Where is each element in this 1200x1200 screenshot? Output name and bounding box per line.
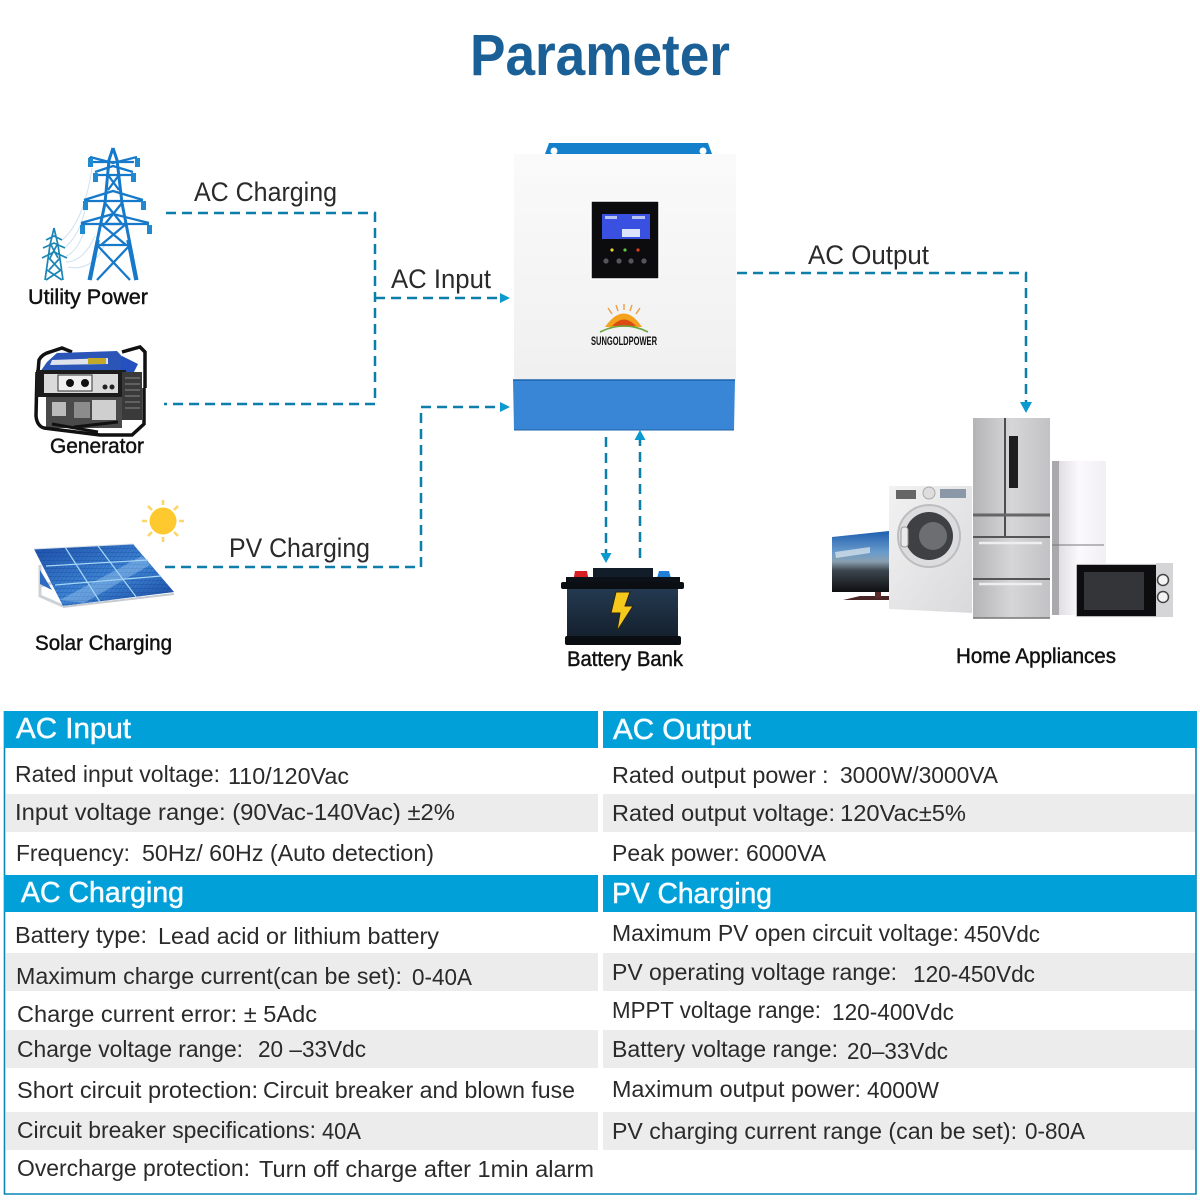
AC Charging rows: Circuit breaker and blown fuse [263, 1077, 575, 1103]
title: Parameter [470, 23, 730, 88]
AC Output rows: 3000W/3000VA [840, 762, 998, 788]
PV Charging rows: Maximum PV open circuit voltage: [612, 920, 959, 946]
spec table [4, 711, 1197, 1194]
AC Input rows: 50Hz/ 60Hz (Auto detection) [142, 840, 434, 866]
icon: solar panel [34, 544, 174, 607]
washing machine [889, 486, 972, 613]
label: home appliances: Home Appliances [956, 644, 1116, 668]
PV Charging rows: 120-400Vdc [832, 999, 954, 1025]
arrow: AC output [737, 273, 1032, 413]
PV Charging rows [612, 920, 1085, 1144]
AC Charging rows: Circuit breaker specifications: [17, 1117, 316, 1143]
arrow: PV charging [165, 402, 510, 567]
label: generator: Generator [50, 434, 144, 458]
label: utility power: Utility Power [28, 285, 148, 309]
PV Charging rows: Maximum output power: [612, 1076, 861, 1102]
table header: AC Charging: AC Charging [21, 877, 184, 909]
arrow: AC charging line from utility and generator [164, 213, 375, 404]
AC Output rows: Rated output power [612, 762, 816, 788]
table header: PV Charging [603, 875, 1196, 912]
icon: generator [36, 347, 145, 435]
logo: sungold power: SUNGOLDPOWER [591, 334, 657, 348]
icon: battery [561, 568, 684, 645]
AC Charging rows: 40A [322, 1118, 361, 1144]
AC Output rows: Rated output voltage: [612, 800, 835, 826]
AC Charging rows: Lead acid or lithium battery [158, 923, 439, 949]
AC Charging rows: Charge current error: ± 5Adc [17, 1001, 317, 1027]
PV Charging rows: 0-80A [1025, 1118, 1085, 1144]
PV Charging rows: MPPT voltage range: [612, 997, 821, 1023]
label: solar charging: Solar Charging [35, 631, 172, 655]
right fridge [1052, 461, 1106, 615]
french door fridge [973, 418, 1050, 618]
table header: AC Output [603, 711, 1197, 748]
AC Output rows [612, 762, 998, 866]
PV Charging rows: PV operating voltage range: [612, 959, 897, 985]
PV Charging rows: 4000W [867, 1077, 940, 1103]
PV Charging rows: 120-450Vdc [913, 961, 1035, 987]
gray row stripes [6, 794, 1195, 1150]
AC Output rows: 120Vac±5% [840, 800, 966, 826]
table header: AC Charging [4, 875, 598, 912]
AC Charging rows: 20 –33Vdc [258, 1036, 366, 1062]
PV Charging rows: PV charging current range (can be set): [612, 1118, 1017, 1144]
AC Charging rows [15, 922, 594, 1182]
label: PV charging: PV Charging [229, 533, 370, 563]
icon: inverter [513, 143, 736, 430]
AC Input rows: Rated input voltage: [15, 761, 220, 787]
AC Charging rows: Maximum charge current(can be set): [16, 963, 402, 989]
PV Charging rows: Battery voltage range: [612, 1036, 838, 1062]
arrow: AC input [375, 293, 510, 303]
AC Charging rows: Turn off charge after 1min alarm [259, 1156, 594, 1182]
AC Charging rows: Overcharge protection: [17, 1155, 250, 1181]
AC Input rows: Frequency: [16, 840, 130, 866]
table header: AC Output: AC Output [613, 714, 751, 746]
icon: sun [142, 500, 184, 542]
table header: PV Charging: PV Charging [612, 878, 772, 910]
PV Charging rows: 20–33Vdc [847, 1038, 948, 1064]
arrow: battery to inverter [634, 430, 646, 558]
label: battery bank: Battery Bank [567, 647, 683, 671]
AC Input rows [15, 761, 455, 866]
AC Input rows: Input voltage range: (90Vac-140Vac) ±2% [15, 799, 455, 825]
label: AC output: AC Output [808, 240, 929, 270]
label: AC input: AC Input [391, 264, 491, 294]
label: AC charging: AC Charging [194, 177, 337, 207]
icon: utility power towers [42, 148, 152, 280]
AC Output rows: : [822, 762, 829, 788]
arrow: inverter to battery [600, 437, 612, 563]
table header: AC Input: AC Input [16, 713, 131, 745]
microwave [1076, 563, 1173, 617]
AC Charging rows: Short circuit protection: [17, 1077, 258, 1103]
AC Charging rows: Battery type: [15, 922, 147, 948]
AC Input rows: 110/120Vac [228, 763, 349, 789]
PV Charging rows: 450Vdc [964, 921, 1040, 947]
AC Output rows: Peak power: 6000VA [612, 840, 826, 866]
AC Charging rows: 0-40A [412, 964, 472, 990]
AC Charging rows: Charge voltage range: [17, 1036, 243, 1062]
logo: sungold power [591, 304, 657, 348]
table header: AC Input [4, 711, 598, 748]
icon: home appliances [832, 418, 1173, 618]
TV [832, 531, 889, 600]
